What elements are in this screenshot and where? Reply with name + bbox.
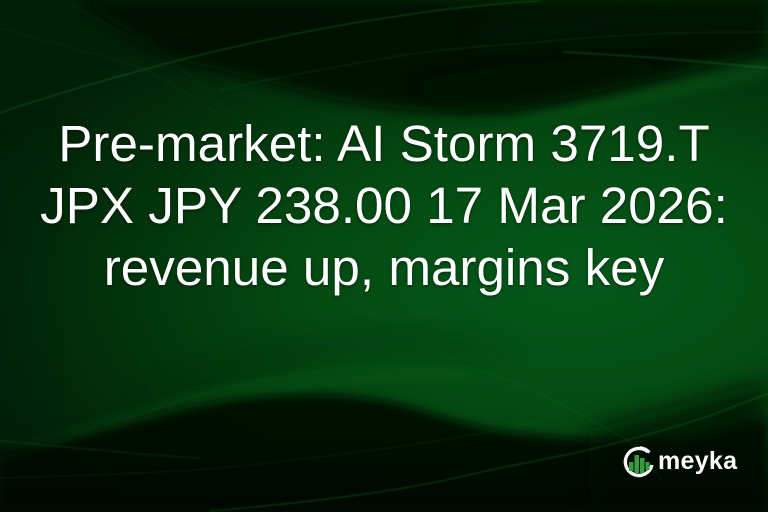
lift above upper line on the right [480, 9, 768, 48]
logo wordmark: meyka [658, 447, 737, 475]
core of top dark lens [460, 80, 640, 112]
icon: circular arrow with bars [624, 446, 654, 478]
title: revenue up, margins key [104, 239, 664, 296]
soft band above the bottom mass [44, 380, 304, 442]
title: JPX JPY 238.00 17 Mar 2026: [40, 177, 728, 234]
bottom right shade [583, 374, 768, 444]
title [40, 115, 728, 298]
top dark mass [80, 0, 768, 111]
title: Pre-market: AI Storm 3719.T [58, 115, 710, 172]
logo: meyka [624, 446, 738, 478]
bottom dark mass [0, 395, 768, 512]
left edge shade [0, 150, 50, 430]
darker streak above the band [350, 340, 380, 344]
bright band on the right of top lens [541, 62, 767, 116]
